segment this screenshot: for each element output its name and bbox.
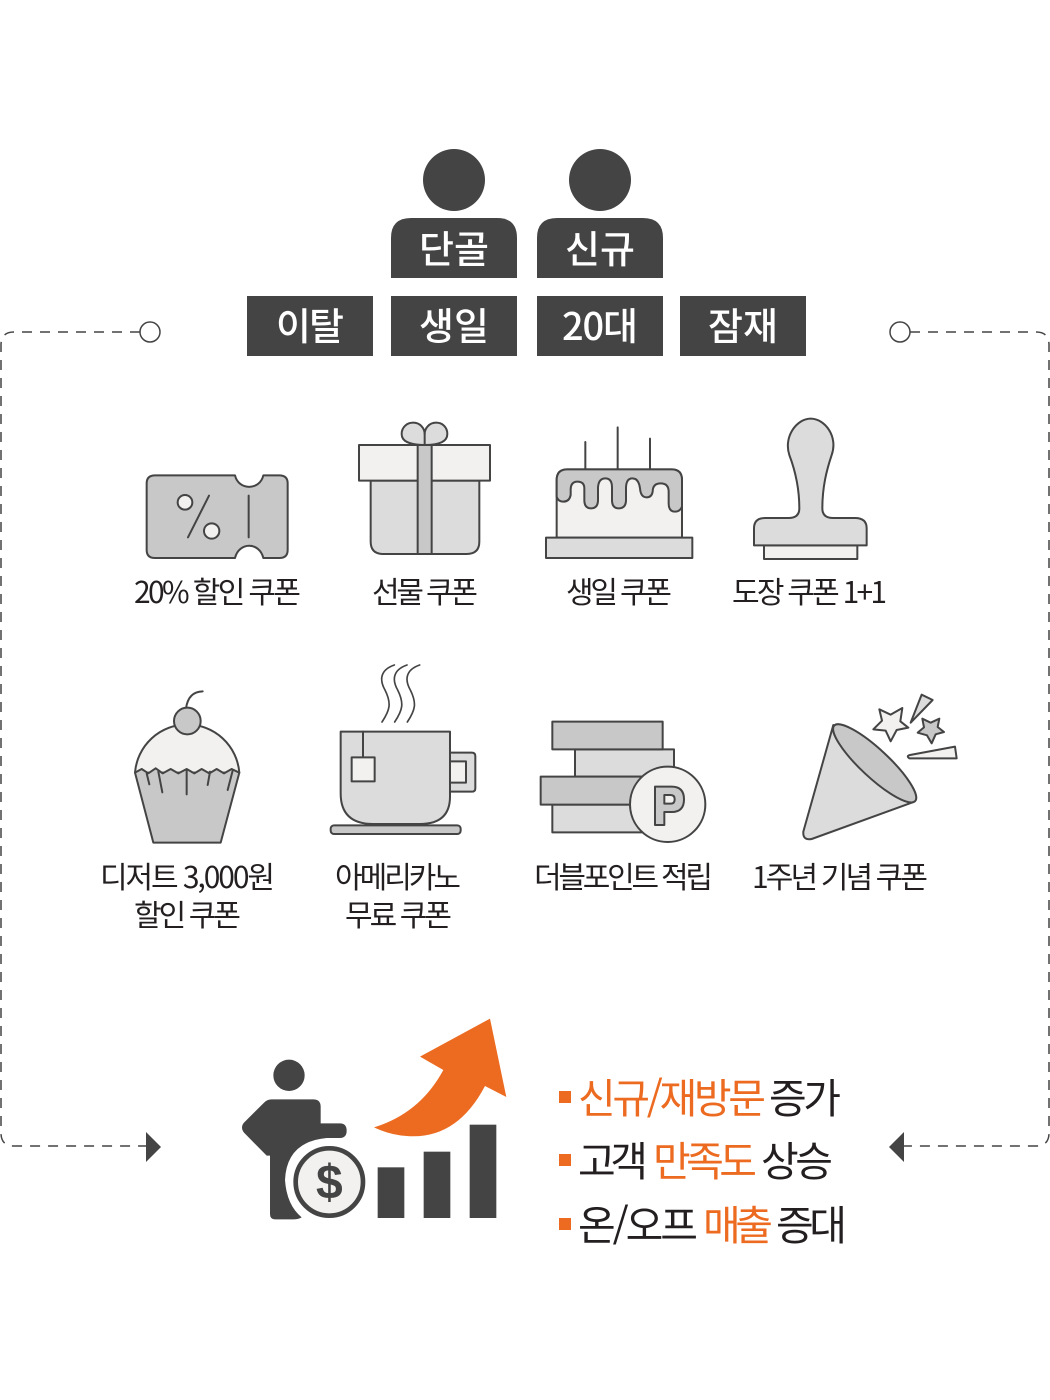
tag: churned [247, 296, 373, 356]
result: higher customer satisfaction: 상승 [761, 1128, 833, 1188]
icon: person with coin and growth chart [242, 1019, 506, 1219]
icon: gift box [359, 423, 490, 554]
label: dessert 3,000 won discount coupon: 디저트 3,000원 [100, 853, 275, 897]
icon: discount ticket [147, 475, 288, 558]
coin: $ [316, 1157, 343, 1210]
persona: new customer [537, 149, 663, 278]
tag: potential: 잠재 [708, 296, 778, 351]
result: higher online and offline sales: 온/오프 [578, 1192, 698, 1252]
tag: birthday: 생일 [419, 296, 489, 351]
right dashed flow line [889, 322, 1049, 1162]
left dashed flow line [1, 322, 161, 1162]
tag: potential [680, 296, 806, 356]
persona: regular customer: 단골 [419, 219, 489, 274]
label: double points: 더블포인트 적립 [534, 853, 713, 897]
persona: new customer: 신규 [565, 219, 635, 274]
result: higher online and offline sales [559, 1192, 847, 1252]
result: higher customer satisfaction: 고객 [578, 1128, 648, 1188]
tag: birthday [391, 296, 517, 356]
icon: point coins [541, 722, 705, 842]
result: more new and return visits: 신규/재방문 [578, 1065, 766, 1125]
tag: twenties: 20대 [562, 296, 638, 351]
result: more new and return visits [559, 1065, 841, 1125]
label: free americano coupon: 무료 쿠폰 [345, 891, 452, 935]
label: stamp coupon 1+1: 도장 쿠폰 1+1 [732, 568, 887, 612]
label: dessert 3,000 won discount coupon: 할인 쿠폰 [134, 891, 241, 935]
label: free americano coupon [335, 853, 461, 935]
persona: regular customer [391, 149, 517, 278]
tag: twenties [537, 296, 663, 356]
label: dessert 3,000 won discount coupon [100, 853, 275, 935]
icon: stamp [754, 419, 867, 559]
result: higher online and offline sales: 증대 [776, 1192, 847, 1252]
result: higher customer satisfaction [559, 1128, 833, 1188]
label: free americano coupon: 아메리카노 [335, 853, 461, 897]
result: higher online and offline sales: 매출 [703, 1192, 773, 1252]
label: gift coupon: 선물 쿠폰 [372, 568, 478, 612]
growth arrow [374, 1019, 506, 1136]
result: higher customer satisfaction: 만족도 [653, 1128, 757, 1188]
label: first anniversary coupon: 1주년 기념 쿠폰 [752, 853, 928, 897]
result: more new and return visits: 증가 [769, 1065, 841, 1125]
icon: coffee cup [331, 665, 475, 834]
label: birthday coupon: 생일 쿠폰 [566, 568, 672, 612]
person [242, 1060, 347, 1219]
coin [296, 1148, 363, 1216]
icon: cupcake [135, 691, 239, 843]
icon: birthday cake [546, 427, 692, 558]
label: 20% discount coupon: 20% 할인 쿠폰 [134, 568, 301, 612]
tag: churned: 이탈 [276, 296, 344, 351]
bars [378, 1125, 496, 1218]
icon: party popper [803, 695, 957, 839]
